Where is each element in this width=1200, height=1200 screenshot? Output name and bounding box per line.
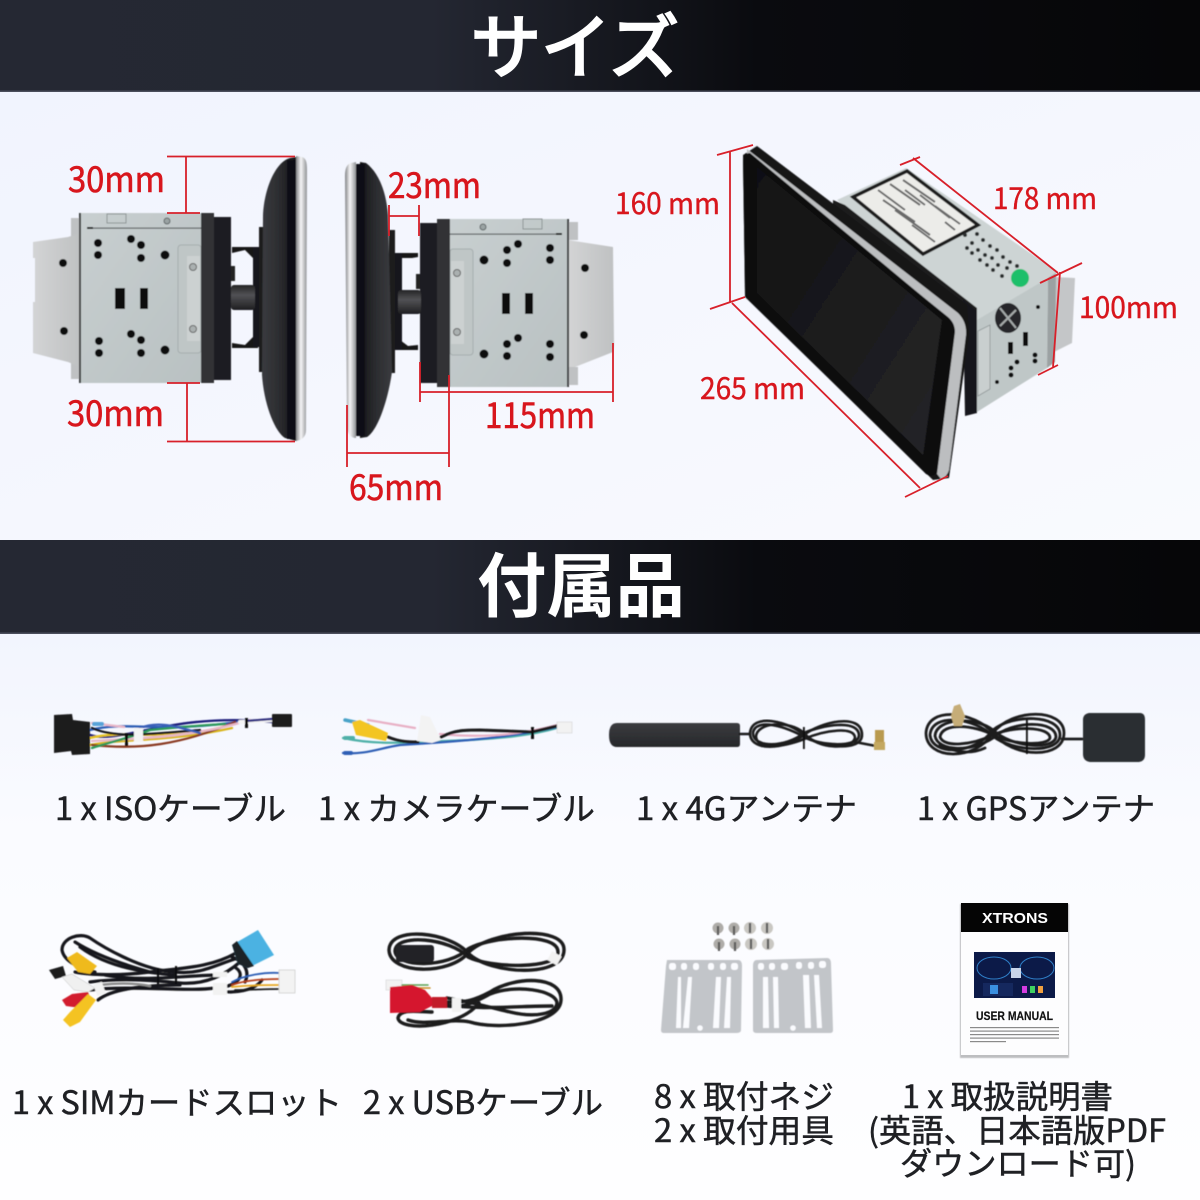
icon: user manual booklet: XTRONS	[982, 910, 1048, 927]
dimension lines: 23mm, 115mm, 65mm	[347, 205, 613, 467]
item: 4G antenna	[609, 721, 885, 830]
label: 23mm: 23mm	[388, 158, 481, 209]
panel: left side view of unit with 30mm dimensions	[33, 152, 307, 442]
icon: side view device, screen facing left	[345, 162, 614, 438]
icon: ISO cable	[54, 714, 292, 755]
icon: SIM card slot cable	[49, 930, 295, 1027]
dimension lines: 30mm top and bottom	[167, 156, 295, 442]
item: SIM card slot cable	[12, 930, 342, 1124]
item: user manual	[868, 903, 1166, 1185]
icon: perspective device	[743, 146, 1075, 480]
caption: user manual line 1: 1 x 取扱説明書	[902, 1072, 1113, 1118]
icon: GPS antenna	[926, 704, 1145, 762]
dimension lines: 160, 178, 100, 265	[710, 145, 1082, 497]
caption: 4G antenna: 1 x 4Gアンテナ	[636, 784, 857, 830]
icon: user manual booklet	[960, 903, 1069, 1058]
caption: user manual line 3: ダウンロード可)	[900, 1139, 1136, 1185]
item: GPS antenna	[917, 704, 1155, 830]
heading band: accessories: 付属品	[477, 531, 685, 632]
icon: camera cable	[343, 715, 572, 755]
icon: 4G antenna	[609, 721, 885, 750]
panel: mirrored side view of unit with depth dimensions	[345, 158, 614, 511]
heading band: accessories	[0, 531, 1200, 634]
caption: screws: 8 x 取付ネジ	[654, 1072, 834, 1118]
label: 115mm: 115mm	[485, 388, 595, 439]
caption: GPS antenna: 1 x GPSアンテナ	[917, 784, 1155, 830]
label: 100mm: 100mm	[1079, 285, 1178, 327]
label: 30mm top: 30mm	[68, 152, 165, 203]
icon: USB cables	[386, 933, 564, 1026]
label: 65mm: 65mm	[349, 460, 443, 511]
caption: USB cables: 2 x USBケーブル	[363, 1078, 603, 1124]
label: 178 mm: 178 mm	[993, 176, 1097, 218]
item: USB cables	[363, 933, 603, 1124]
icon: side view device, screen facing right	[33, 156, 307, 441]
caption: camera cable: 1 x カメラケーブル	[318, 784, 595, 830]
label: 265 mm: 265 mm	[700, 366, 805, 408]
icon: screws	[712, 922, 774, 951]
panel: perspective view of unit with overall dimensions	[615, 145, 1178, 497]
item: screws and brackets	[654, 922, 834, 1152]
icon: left bracket	[661, 960, 742, 1033]
label: 160 mm: 160 mm	[615, 181, 720, 223]
icon: user manual booklet: USER MANUAL	[976, 1009, 1053, 1023]
item: ISO cable	[54, 714, 292, 830]
label: 30mm bottom: 30mm	[67, 386, 164, 437]
caption: SIM card slot cable: 1 x SIMカードスロット	[12, 1078, 342, 1124]
caption: user manual line 2: (英語、日本語版PDF	[868, 1106, 1166, 1152]
icon: right bracket	[753, 958, 833, 1033]
caption: ISO cable: 1 x ISOケーブル	[55, 784, 286, 830]
heading band: size	[0, 0, 1200, 93]
item: camera cable	[318, 715, 595, 830]
caption: brackets: 2 x 取付用具	[654, 1106, 834, 1152]
